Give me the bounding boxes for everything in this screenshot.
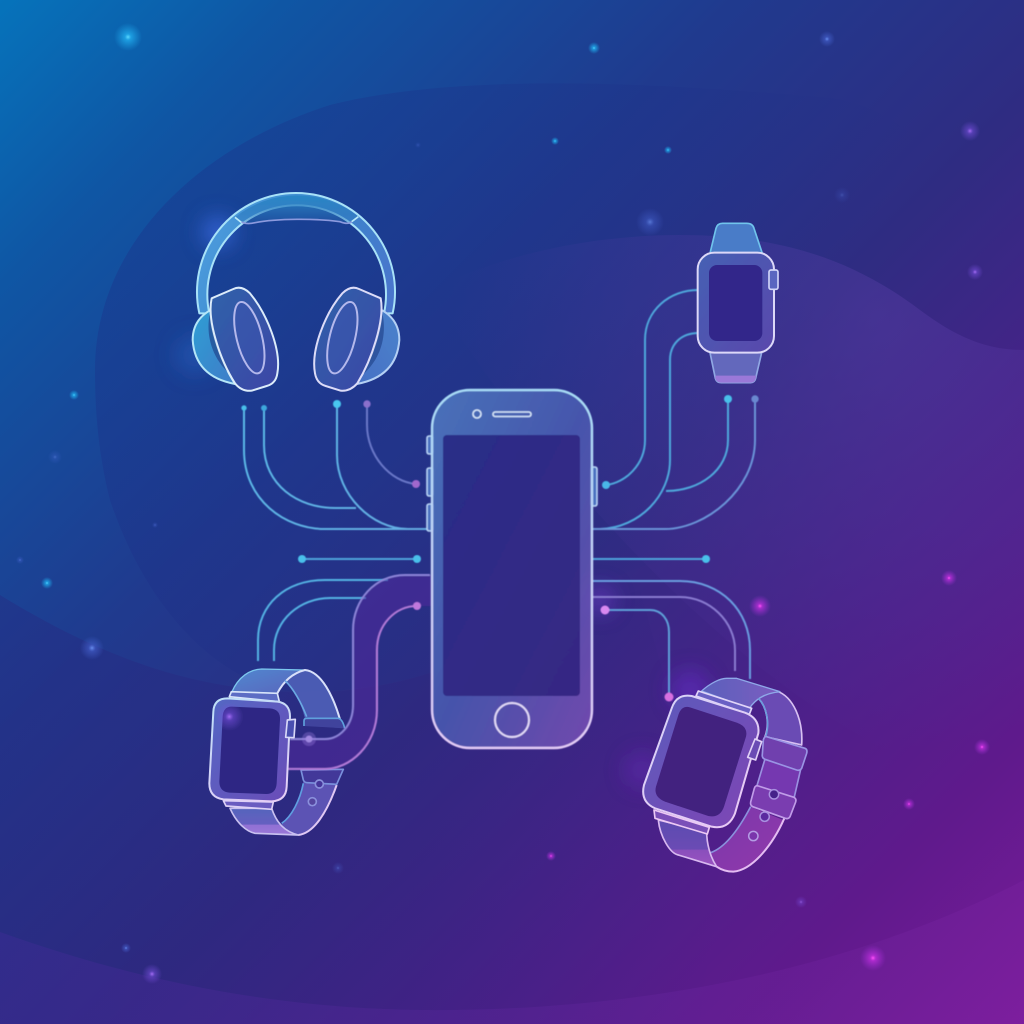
upper back strap bbox=[758, 691, 802, 745]
phone screen bbox=[443, 435, 580, 696]
lower front strap bbox=[658, 820, 717, 867]
case bbox=[209, 698, 290, 801]
lower back strap bbox=[282, 782, 337, 835]
connector lines: headphones to phone bbox=[241, 400, 428, 529]
watch case bbox=[698, 253, 774, 353]
right cup shadow bbox=[358, 310, 384, 378]
headband bbox=[197, 193, 395, 313]
keeper one bbox=[762, 737, 807, 770]
thick purple connector ribbon bbox=[288, 575, 432, 769]
lower keeper bbox=[301, 769, 343, 784]
soft glows behind devices bbox=[175, 216, 710, 788]
icon: smartphone bbox=[427, 390, 597, 748]
lower strap edges bbox=[717, 818, 784, 872]
middle strap bbox=[756, 758, 801, 798]
front camera bbox=[473, 410, 481, 418]
lower strap edges bbox=[298, 785, 337, 835]
top lug bbox=[696, 691, 752, 714]
left ear cup bbox=[193, 310, 235, 384]
left ear pad bbox=[211, 288, 278, 391]
keeper two bbox=[751, 786, 796, 819]
crown bbox=[769, 270, 778, 289]
upper strap outer edges bbox=[277, 670, 340, 719]
icon: upper right smartwatch bbox=[698, 223, 778, 383]
side buttons bbox=[427, 436, 597, 531]
phone body bbox=[432, 390, 592, 748]
headband inner strap line bbox=[242, 219, 352, 224]
connector lines: lower right watch to phone bbox=[592, 581, 750, 702]
upper back strap bbox=[285, 670, 340, 719]
speaker slot bbox=[493, 412, 531, 416]
icon: lower right smartwatch bbox=[643, 678, 807, 872]
connector lines: left watch to phone bbox=[258, 580, 388, 661]
left inner pad ring bbox=[228, 299, 270, 376]
watch screen bbox=[709, 265, 762, 341]
right inner pad ring bbox=[321, 299, 363, 376]
right ear cup bbox=[357, 310, 399, 384]
screen glint bbox=[215, 703, 243, 731]
icon: headphones bbox=[193, 193, 399, 391]
upper strap inner edge bbox=[285, 681, 307, 717]
strap holes bbox=[769, 790, 779, 799]
upper front strap bbox=[702, 678, 780, 708]
left cup shadow bbox=[208, 310, 235, 378]
home button bbox=[495, 703, 529, 737]
icon: lower left smartwatch case bbox=[209, 692, 295, 809]
upper keeper bbox=[304, 718, 345, 728]
upper inner edge bbox=[758, 698, 768, 737]
middle strap edges bbox=[757, 759, 801, 798]
crown bbox=[748, 739, 762, 760]
top strap bbox=[710, 223, 762, 253]
bottom lug bbox=[654, 810, 709, 834]
connector lines: upper right watch to phone bbox=[592, 290, 759, 529]
headband top segment bbox=[235, 195, 358, 223]
screen bbox=[219, 707, 280, 794]
lower back strap bbox=[711, 807, 783, 872]
headband dividers bbox=[235, 217, 358, 223]
screen bbox=[656, 707, 746, 816]
connector lines: horizontal links bbox=[298, 555, 710, 563]
upper front strap bbox=[232, 669, 305, 693]
right ear pad bbox=[314, 288, 381, 391]
lower front strap bbox=[230, 808, 298, 835]
crown bbox=[286, 719, 295, 738]
strap tip bbox=[715, 376, 756, 383]
top lug bbox=[229, 692, 279, 702]
bottom lug bbox=[223, 801, 273, 809]
strap holes bbox=[315, 780, 323, 788]
bottom strap bbox=[710, 353, 762, 383]
case bbox=[643, 696, 758, 827]
lower left watch straps bbox=[230, 669, 345, 835]
